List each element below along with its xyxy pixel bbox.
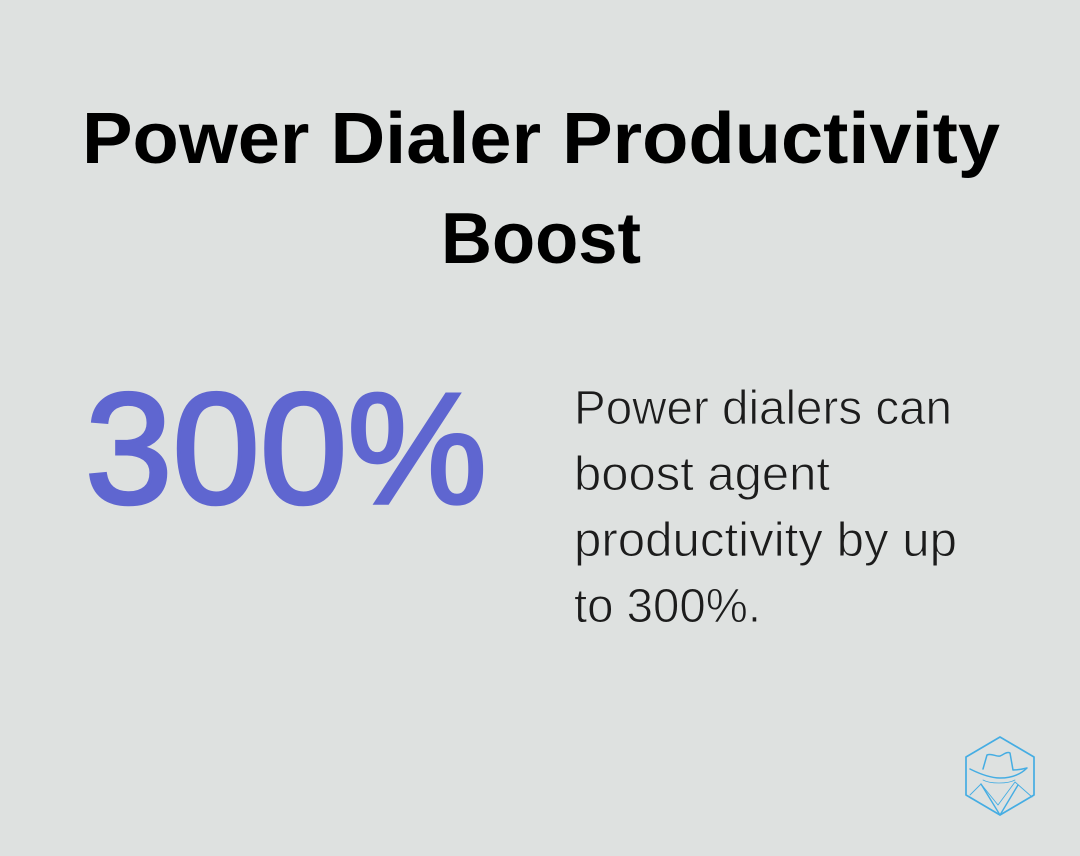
title	[82, 99, 1000, 279]
description text: boost agent	[574, 448, 830, 501]
title: Power Dialer Productivity	[82, 99, 1000, 179]
description text: Power dialers can	[574, 382, 952, 435]
description text	[574, 382, 957, 633]
description text: to 300%.	[574, 580, 761, 633]
description text: productivity by up	[574, 514, 957, 567]
icon: spy logo in hexagon	[966, 737, 1034, 815]
big stat: 300%: 300%	[85, 361, 487, 537]
title: Boost	[441, 199, 641, 279]
